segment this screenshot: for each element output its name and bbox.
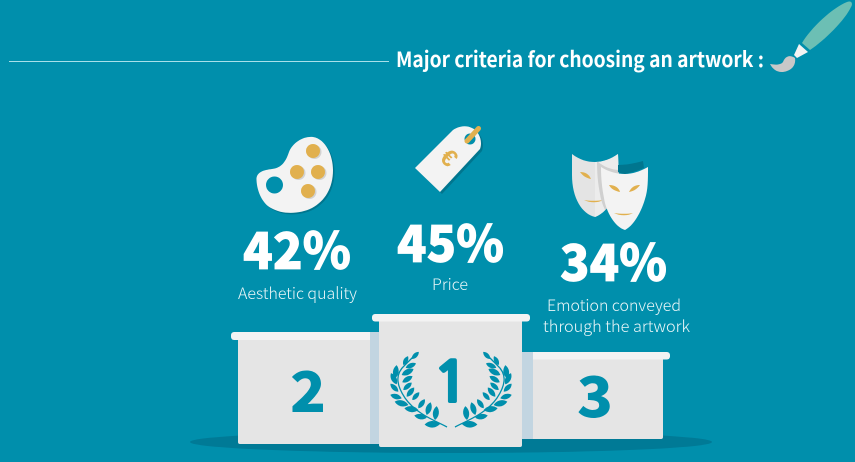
icon: theatre masks (572, 154, 648, 230)
icon: price tag (415, 126, 483, 194)
podium: second place: 2 (290, 348, 326, 429)
stat: emotion conveyed: Emotion conveyed (547, 292, 681, 316)
stat: emotion conveyed: 34% (560, 222, 667, 296)
stat: emotion conveyed (543, 222, 691, 337)
icon: paintbrush (770, 1, 852, 72)
icon: palette (256, 137, 334, 214)
podium: second place (231, 332, 380, 444)
euro sign: € (434, 144, 463, 173)
podium ground shadow (190, 431, 712, 453)
header rule (9, 61, 389, 62)
laurel wreath right (455, 350, 513, 428)
stat: aesthetic quality: Aesthetic quality (238, 280, 357, 304)
laurel wreath left (389, 350, 447, 428)
title: Major criteria for choosing an artwork : (396, 44, 764, 74)
stat: aesthetic quality: 42% (243, 210, 351, 284)
podium: third place: 3 (577, 353, 613, 434)
stat: price: 45% (397, 203, 504, 277)
podium: third place (522, 352, 670, 439)
podium: first place (372, 314, 530, 447)
podium: first place: 1 (432, 356, 470, 411)
stat: emotion conveyed: through the artwork (543, 313, 691, 337)
stat: price: Price (432, 271, 468, 295)
